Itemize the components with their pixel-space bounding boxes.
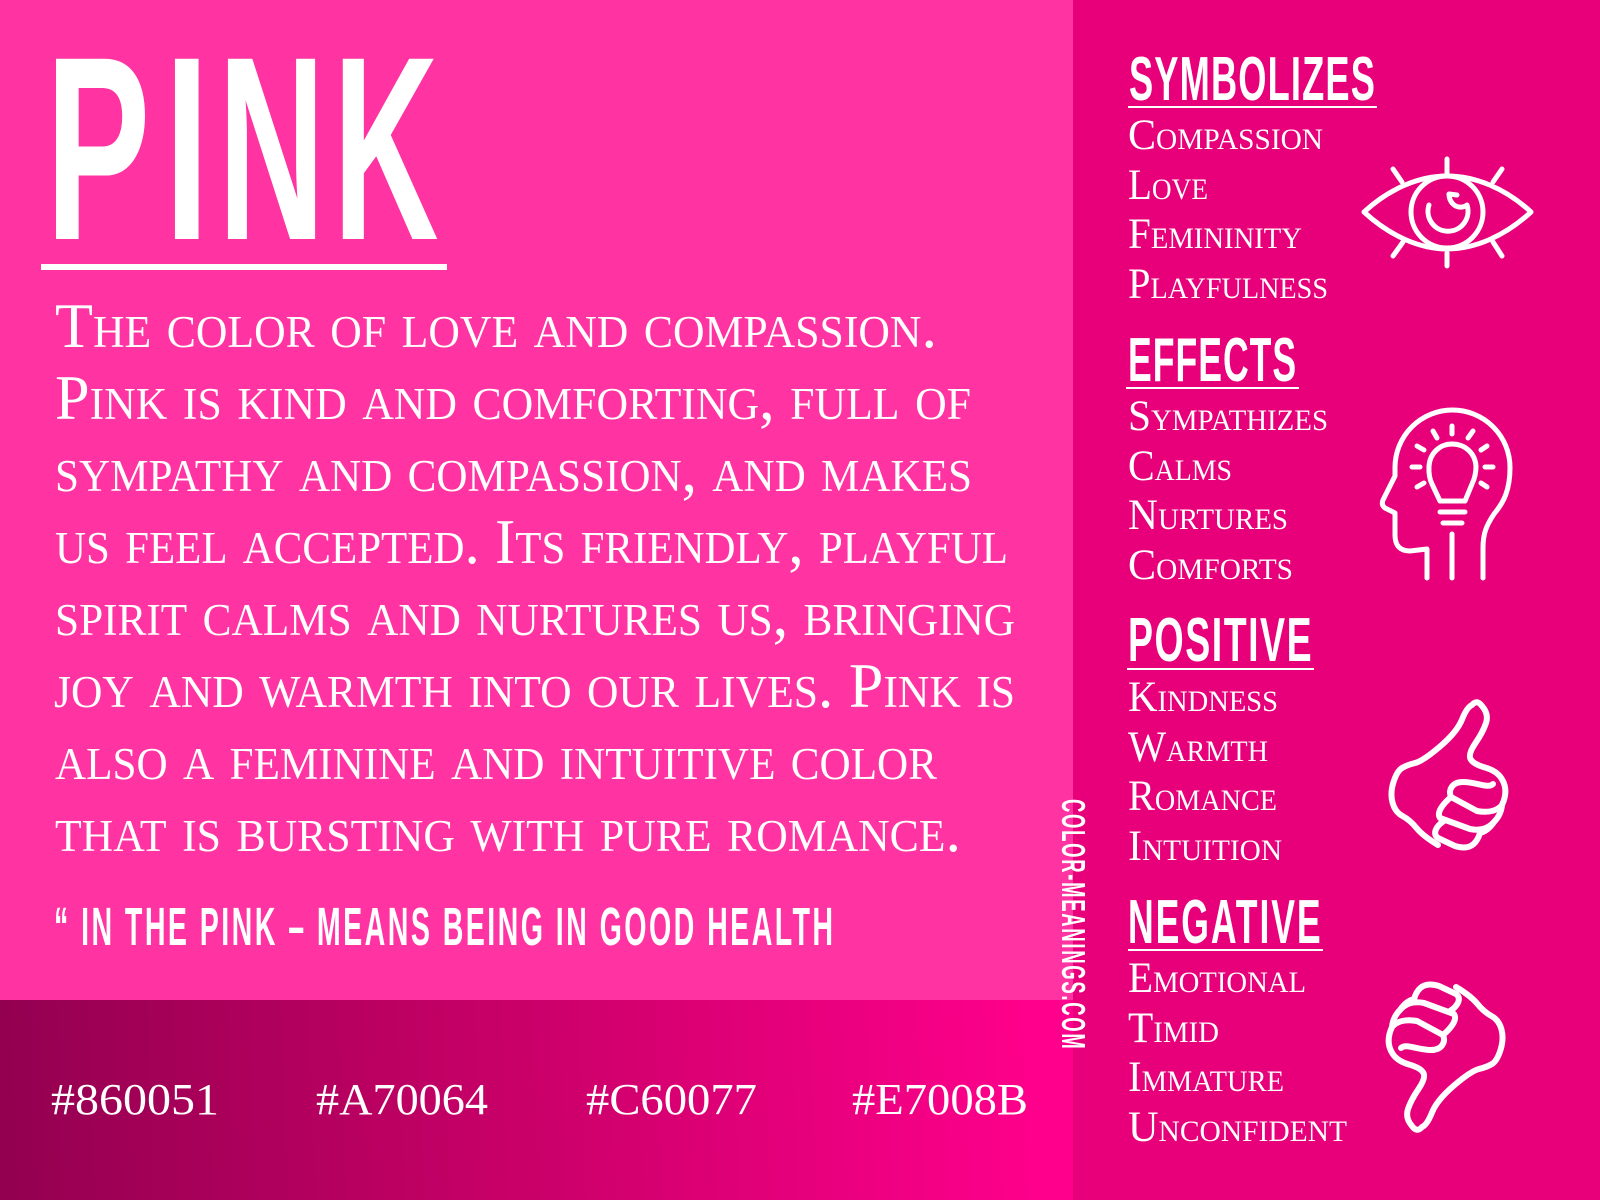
colour hex codes bbox=[51, 1075, 1028, 1124]
description text block: us feel accepted. Its friendly, playful bbox=[55, 506, 1008, 577]
vertical site credit: COLOR-MEANINGS.COM bbox=[1055, 799, 1092, 1049]
panel: sidebar bbox=[1073, 0, 1600, 1200]
list: positive items bbox=[1128, 674, 1282, 870]
panel: colour gradient band bbox=[0, 1000, 1073, 1200]
section: effects bbox=[1126, 324, 1328, 589]
section: positive bbox=[1127, 604, 1314, 870]
list: symbolizes items: Femininity bbox=[1128, 211, 1302, 258]
list: effects items: Nurtures bbox=[1128, 492, 1288, 539]
list: positive items: Intuition bbox=[1128, 823, 1282, 870]
description text block: that is bursting with pure romance. bbox=[55, 794, 961, 865]
colour hex codes: #A70064 bbox=[316, 1075, 488, 1124]
heading: symbolizes: SYMBOLIZES bbox=[1129, 44, 1375, 113]
list: effects items: Sympathizes bbox=[1128, 393, 1328, 440]
icon: thumbs down bbox=[1389, 985, 1503, 1130]
list: negative items: Emotional bbox=[1128, 955, 1306, 1002]
list: effects items: Comforts bbox=[1128, 542, 1293, 589]
list: symbolizes items: Playfulness bbox=[1128, 261, 1328, 308]
list: positive items: Warmth bbox=[1128, 724, 1268, 771]
section: negative bbox=[1128, 886, 1347, 1151]
description text block: joy and warmth into our lives. Pink is bbox=[54, 650, 1015, 721]
description text block: spirit calms and nurtures us, bringing bbox=[55, 578, 1015, 649]
title: PINK: P bbox=[46, 1, 150, 295]
heading: effects: EFFECTS bbox=[1128, 324, 1296, 395]
colour hex codes: #860051 bbox=[51, 1075, 219, 1124]
description text block: sympathy and compassion, and makes bbox=[55, 434, 972, 505]
heading: positive: POSITIVE bbox=[1128, 604, 1312, 674]
icon: head with light bulb bbox=[1382, 410, 1510, 578]
colour hex codes: #C60077 bbox=[586, 1075, 757, 1124]
title: PINK bbox=[41, 1, 447, 296]
list: negative items: Unconfident bbox=[1128, 1104, 1347, 1151]
colour hex codes: #E7008B bbox=[852, 1075, 1028, 1124]
description text block: The color of love and compassion. bbox=[55, 290, 937, 361]
list: symbolizes items: Compassion bbox=[1128, 112, 1323, 159]
icon: eye bbox=[1364, 159, 1531, 266]
title: PINK: N bbox=[218, 3, 325, 296]
panel: main pink background bbox=[0, 0, 1073, 1000]
heading: negative: NEGATIVE bbox=[1128, 886, 1321, 957]
title: PINK: I bbox=[164, 3, 209, 295]
description text block bbox=[54, 290, 1015, 865]
list: positive items: Romance bbox=[1128, 773, 1277, 820]
description text block: also a feminine and intuitive color bbox=[55, 722, 937, 793]
list: symbolizes items: Love bbox=[1128, 162, 1208, 209]
list: positive items: Kindness bbox=[1128, 674, 1278, 721]
title: PINK: K bbox=[333, 2, 439, 295]
list: negative items: Timid bbox=[1128, 1005, 1219, 1052]
section: symbolizes bbox=[1128, 44, 1377, 308]
list: effects items: Calms bbox=[1128, 443, 1232, 490]
description text block: Pink is kind and comforting, full of bbox=[55, 362, 971, 433]
list: symbolizes items bbox=[1128, 112, 1328, 308]
list: negative items: Immature bbox=[1128, 1054, 1284, 1101]
quote: “ IN THE PINK – MEANS BEING IN GOOD HEALTH bbox=[54, 898, 833, 957]
icon: thumbs up bbox=[1391, 702, 1505, 847]
list: effects items bbox=[1128, 393, 1328, 589]
list: negative items bbox=[1128, 955, 1347, 1151]
